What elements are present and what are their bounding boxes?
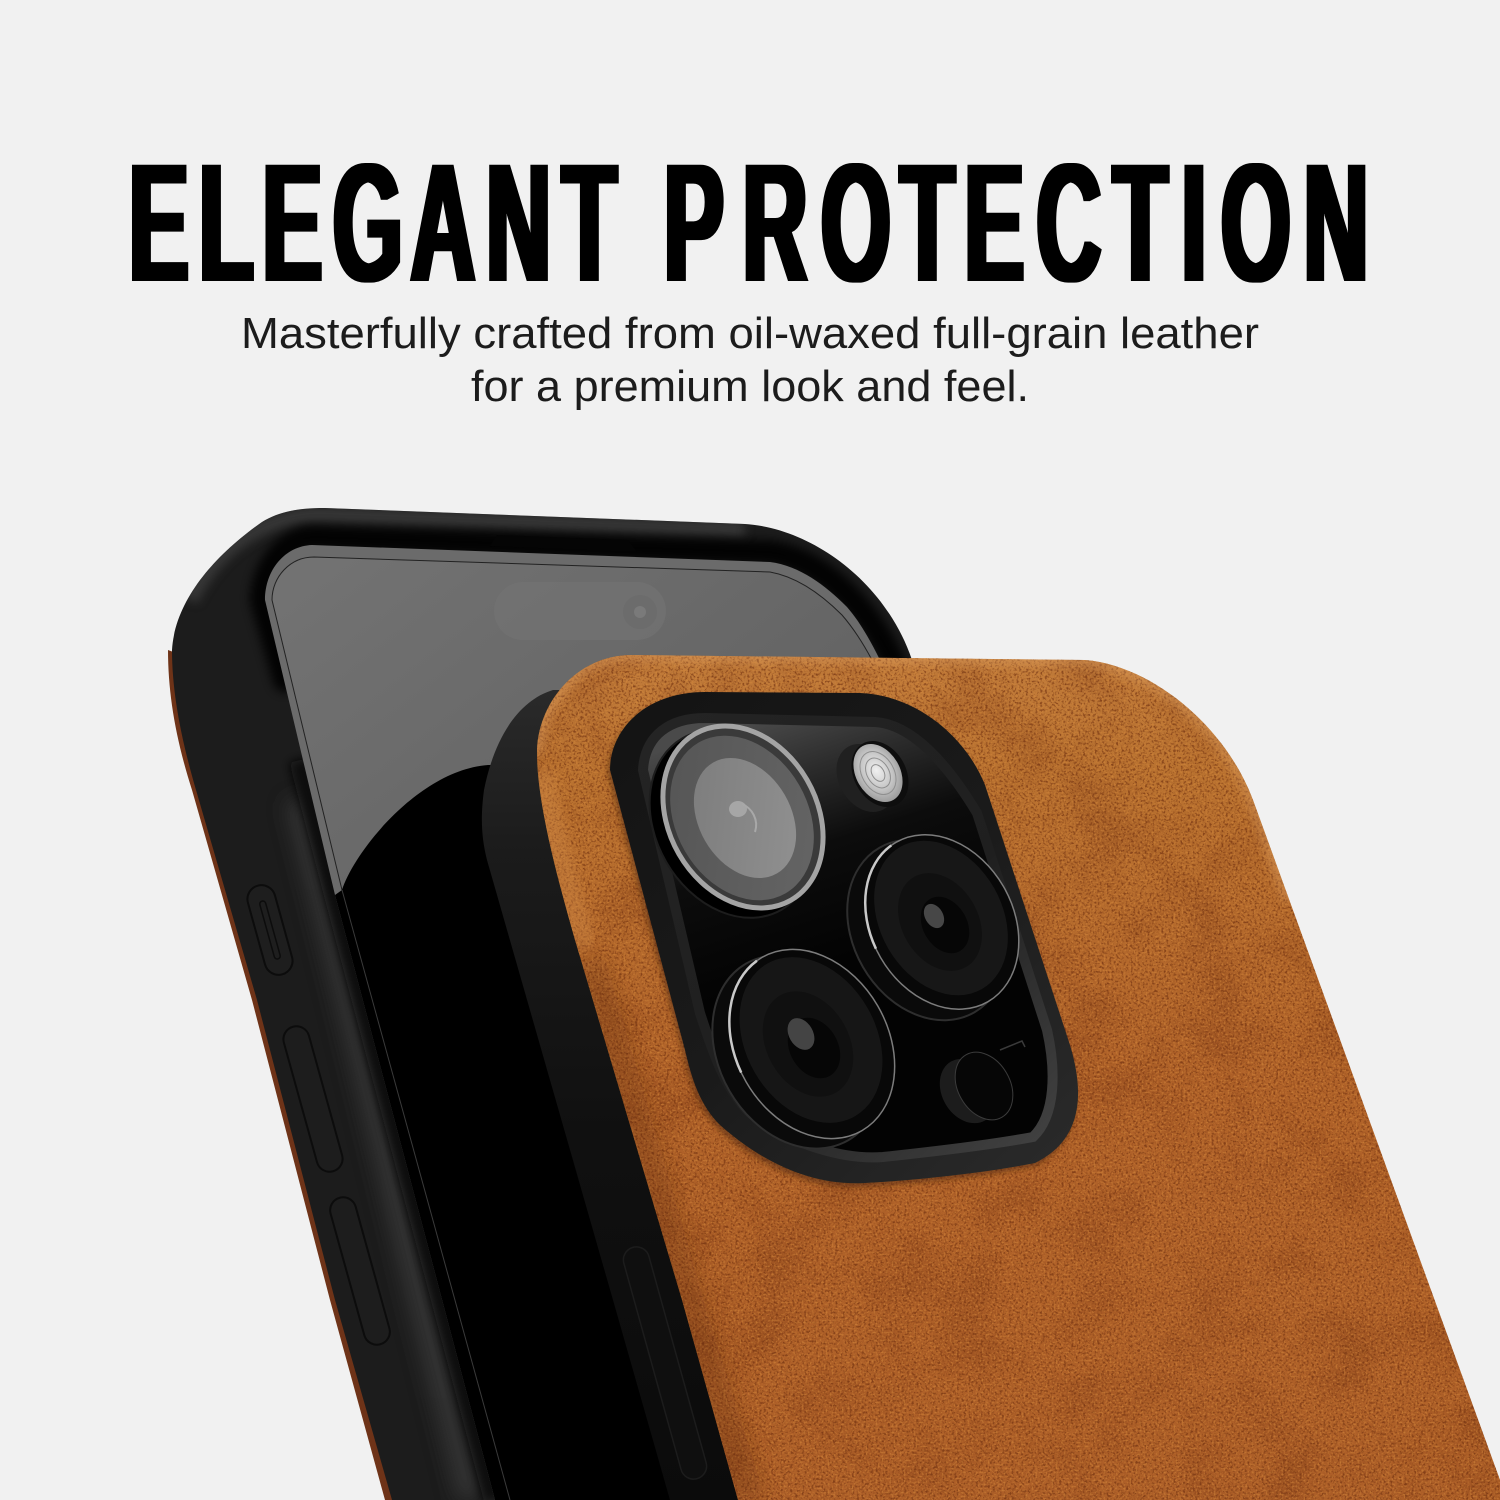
ultra-wide lens center <box>782 1013 820 1055</box>
flash barrel <box>825 733 907 823</box>
telephoto lens center <box>920 900 948 932</box>
leather edge of front case <box>168 650 420 1500</box>
ultra-wide lens <box>678 919 928 1179</box>
bumper base <box>160 500 930 1500</box>
ultra-wide lens glass <box>711 931 911 1149</box>
main lens barrel <box>617 700 847 948</box>
glass bezel <box>265 545 880 1500</box>
ultra-wide lens ring <box>696 919 928 1169</box>
telephoto lens inner <box>881 858 999 986</box>
telephoto lens ring <box>835 807 1049 1037</box>
leather dark grain <box>520 640 1500 1500</box>
screen edge line <box>342 890 510 1500</box>
telephoto lens barrel <box>815 811 1039 1049</box>
power button <box>620 1244 710 1482</box>
flash reflector <box>843 735 913 811</box>
camera glass window <box>643 718 1053 1157</box>
bumper inner shadow <box>262 537 895 680</box>
ultra-wide lens barrel <box>678 925 916 1179</box>
back case bumper <box>482 690 760 1500</box>
main lens glass <box>641 710 843 926</box>
leather back <box>520 640 1500 1500</box>
earpiece notch <box>490 535 637 552</box>
dynamic island <box>494 582 666 640</box>
main lens center <box>729 801 756 832</box>
action button <box>244 882 296 978</box>
telephoto lens glass <box>847 816 1035 1020</box>
main lens ring <box>631 697 855 937</box>
camera module <box>610 692 1078 1183</box>
bumper inner side shade <box>300 760 495 1500</box>
flash rings <box>853 745 903 801</box>
ultra-wide lens inner <box>744 975 872 1113</box>
bumper top highlight <box>190 515 745 600</box>
subtitle: Masterfully crafted from oil-waxed full-grain leather <box>241 309 1259 358</box>
flash body <box>840 731 920 817</box>
front camera <box>623 595 657 629</box>
title: ELEGANT PROTECTION <box>129 129 1368 317</box>
front phone case <box>160 500 930 1500</box>
camera shadow on leather <box>608 696 1076 1187</box>
main lens inner <box>673 740 817 896</box>
flash <box>825 731 920 823</box>
leather blotches <box>520 640 1500 1500</box>
volume down button <box>327 1194 393 1348</box>
screen glass <box>272 557 872 1500</box>
LiDAR window <box>943 1042 1025 1130</box>
volume up button <box>280 1023 346 1175</box>
ultra-wide lens highlight arc <box>696 919 928 1169</box>
ultra-wide lens core <box>777 1008 851 1088</box>
back case <box>482 640 1500 1500</box>
camera island rim <box>610 692 1078 1183</box>
leather lower left shade <box>590 960 750 1500</box>
subtitle <box>241 309 1259 411</box>
leather light grain <box>520 640 1500 1500</box>
black rubber bumper <box>160 500 930 1500</box>
leather left side highlight <box>541 770 585 950</box>
microphone slit <box>1000 1041 1025 1050</box>
telephoto lens highlight arc <box>835 807 1049 1037</box>
subtitle: for a premium look and feel. <box>471 362 1029 411</box>
leather top edge highlight <box>537 655 1290 900</box>
bumper side streak <box>297 800 470 1500</box>
black reflection on screen <box>335 765 760 1500</box>
main lens <box>617 697 855 948</box>
LiDAR barrel <box>928 1049 1008 1133</box>
LiDAR sensor <box>928 1042 1025 1133</box>
telephoto lens <box>815 807 1049 1049</box>
telephoto lens core <box>911 888 979 962</box>
leather base <box>520 640 1500 1500</box>
